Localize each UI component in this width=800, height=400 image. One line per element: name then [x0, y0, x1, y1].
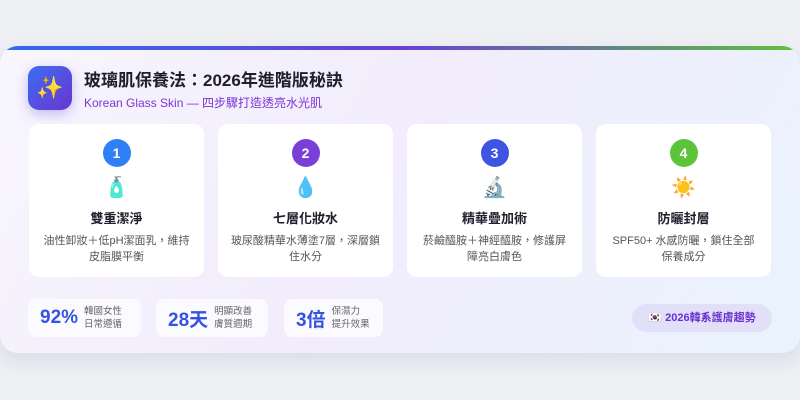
title: 玻璃肌保養法：2026年進階版秘訣 [84, 71, 343, 90]
stat 2 [156, 299, 268, 337]
panel: step 1: 🧴 [104, 177, 129, 199]
panel: step 1 [29, 124, 204, 277]
stat 2: 28天 [168, 310, 208, 330]
stat 3 [284, 299, 383, 337]
subtitle: Korean Glass Skin — 四步驟打造透亮水光肌 [84, 96, 322, 110]
icon: sparkles [28, 66, 72, 110]
panel: step 3: 3 [491, 145, 498, 161]
panel: step 4: 防曬封層 [657, 211, 710, 226]
panel: step 2: 七層化妝水 [273, 211, 338, 226]
main card [0, 46, 800, 353]
panel: step 2 [218, 124, 393, 277]
panel: step 4 [596, 124, 771, 277]
panel: step 3: 🔬 [482, 177, 507, 199]
panel: step 1: 雙重潔淨 [90, 211, 142, 226]
stat 2: 明顯改善 [214, 306, 252, 317]
panel: step 2: 💧 [293, 177, 318, 199]
badge: 🇰🇷 2026韓系護膚趨勢 [648, 312, 756, 324]
stat 3: 保濕力 [332, 306, 360, 317]
stat 2: 膚質週期 [214, 319, 252, 330]
stat 1: 92% [40, 307, 78, 328]
panel: step 1: 1 [113, 145, 120, 161]
panel: step 3: 精華疊加術 [462, 211, 527, 226]
panel: step 3: 菸鹼醯胺＋神經醯胺，修護屏障亮白膚色 [423, 235, 566, 263]
panel: step 2: 2 [302, 145, 309, 161]
stat 1: 韓國女性 [84, 306, 122, 317]
stat 1 [28, 299, 141, 337]
panel: step 4: ☀️ [671, 177, 696, 199]
panel: step 2: 玻尿酸精華水薄塗7層，深層鎖住水分 [231, 235, 380, 263]
panel: step 1: 油性卸妝＋低pH潔面乳，維持皮脂膜平衡 [43, 235, 190, 263]
panel: step 3 [407, 124, 582, 277]
panel: step 4: 4 [680, 145, 687, 161]
stat 3: 3倍 [296, 310, 326, 330]
stat 3: 提升效果 [332, 319, 370, 330]
icon: sparkles: ✨ [36, 75, 64, 100]
stat 1: 日常遵循 [84, 319, 122, 330]
badge [632, 304, 772, 332]
panel: step 4: SPF50+ 水感防曬，鎖住全部保養成分 [612, 235, 755, 263]
